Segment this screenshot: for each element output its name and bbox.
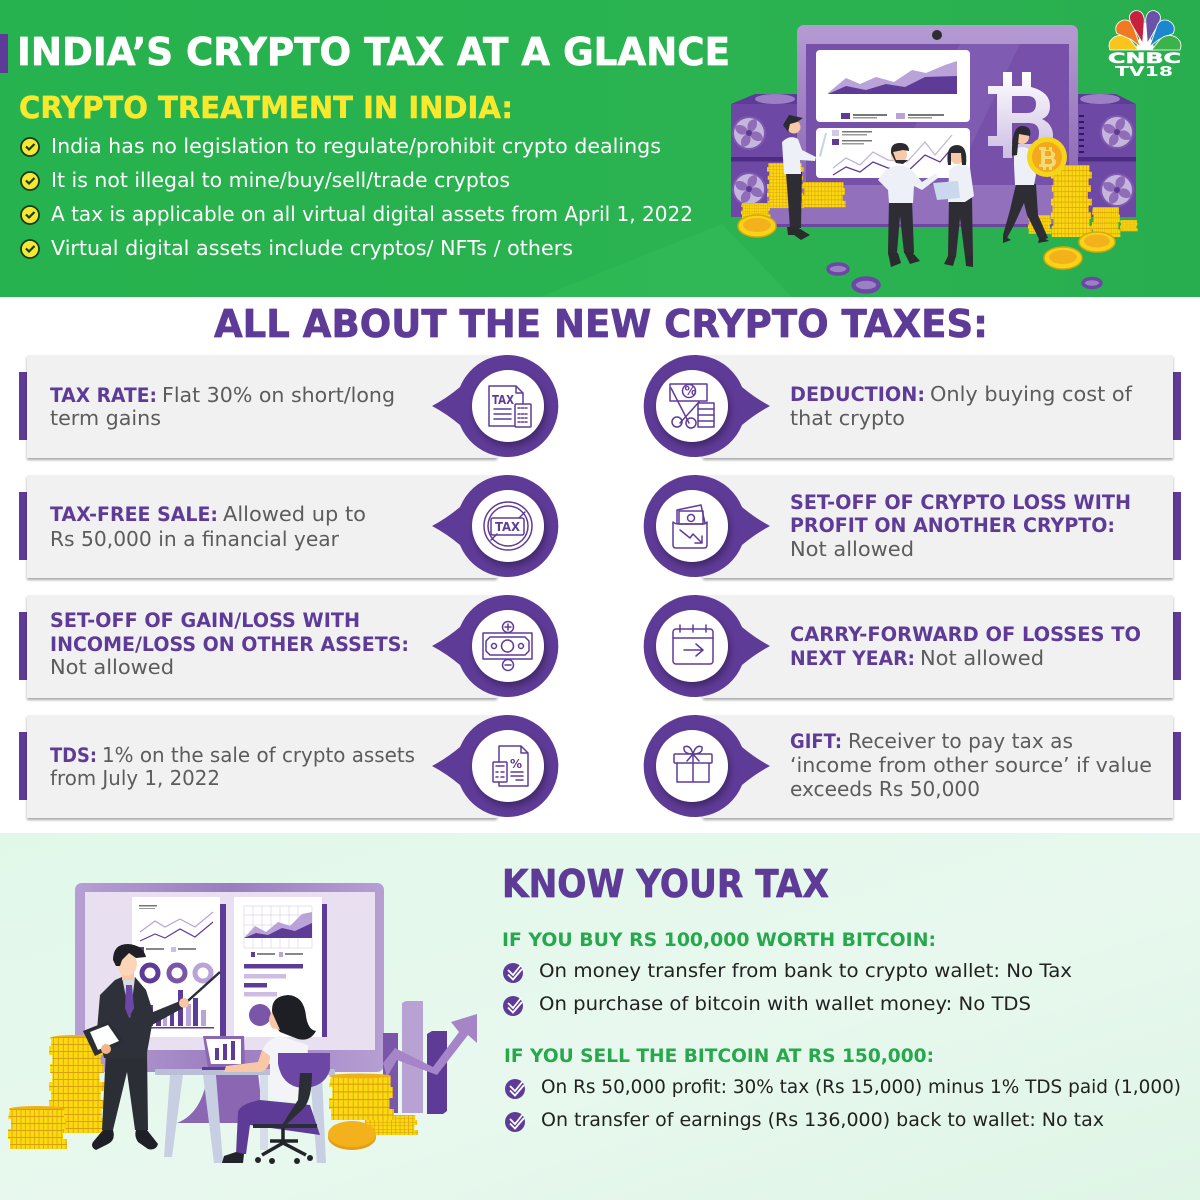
logo: CNBC TV18: TV18: [1115, 65, 1173, 80]
icon: banknote plus minus: [432, 595, 558, 697]
panel: deduction: DEDUCTION:: [790, 383, 925, 406]
buy section: On money transfer from bank to crypto wallet: No Tax: [539, 960, 1072, 982]
chart bars and rising arrow: [383, 1001, 477, 1114]
icon: wallet with falling arrow: [644, 475, 770, 577]
icon: percent document and calculator: %: [510, 757, 522, 771]
panel: tax-free sale: [19, 475, 558, 578]
panel: gift: ‘income from other source’ if value: [790, 753, 1152, 777]
panel: carry-forward: [644, 595, 1181, 698]
panel: deduction: [644, 355, 1181, 458]
panel: tax rate: TAX RATE:: [50, 384, 157, 407]
panel: gift: GIFT:: [790, 730, 842, 753]
panel: set-off gain loss: Not allowed: [50, 655, 174, 679]
panel: gift: Receiver to pay tax as: [848, 729, 1073, 753]
icon: scissors cutting money: [644, 355, 770, 457]
panel: TDS: 1% on the sale of crypto assets: [102, 743, 415, 767]
heading: know your tax: KNOW YOUR TAX: [502, 862, 829, 906]
icon: scissors cutting money: %: [684, 384, 697, 398]
bullet list: [21, 134, 693, 260]
panel: know your tax: [0, 833, 1200, 1200]
panel: TDS: from July 1, 2022: [50, 766, 220, 790]
buy section: On purchase of bitcoin with wallet money: No TDS: [539, 993, 1031, 1015]
panel: set-off gain loss: SET-OFF OF GAIN/LOSS WITH: [50, 609, 360, 632]
illustration: crypto laptop with people: [731, 25, 1138, 292]
panel: TDS: [19, 715, 558, 818]
panel: header: [0, 0, 1200, 297]
panel: deduction: that crypto: [790, 406, 905, 430]
title: INDIA’S CRYPTO TAX AT A GLANCE: [17, 30, 730, 74]
icon: tax document: [432, 355, 558, 457]
laptop: [767, 25, 1078, 227]
icon: calendar arrow: [644, 595, 770, 697]
bullet list: It is not illegal to mine/buy/sell/trade cryptos: [51, 168, 510, 192]
panel: set-off crypto loss: SET-OFF OF CRYPTO LOSS WITH: [790, 491, 1131, 514]
icon: no tax: [432, 475, 558, 577]
bitcoin symbol: [988, 72, 1053, 158]
panel: set-off crypto loss: PROFIT ON ANOTHER CRYPTO:: [790, 514, 1115, 537]
woman holding coin: [1003, 126, 1067, 243]
subheading: CRYPTO TREATMENT IN INDIA:: [19, 91, 513, 126]
panel: tax rate: [19, 355, 558, 458]
panel: set-off gain loss: [19, 595, 558, 698]
panel: carry-forward: Not allowed: [920, 646, 1044, 670]
sell section: IF YOU SELL THE BITCOIN AT RS 150,000:: [504, 1045, 934, 1067]
panel: tax-free sale: TAX-FREE SALE:: [50, 503, 218, 526]
coin stacks: [8, 1035, 418, 1150]
icon: no tax: TAX: [495, 520, 521, 534]
buy section: [502, 929, 1072, 1016]
gears: [828, 264, 1101, 292]
bullet list: India has no legislation to regulate/prohibit crypto dealings: [51, 134, 661, 158]
panel: tax rate: Flat 30% on short/long: [162, 383, 395, 407]
icon: percent document and calculator: [432, 715, 558, 817]
panel: tax-free sale: Rs 50,000 in a financial year: [50, 527, 340, 551]
icon: tax document: TAX: [492, 393, 515, 407]
monitor: [75, 883, 384, 1123]
logo: CNBC TV18: CNBC: [1108, 51, 1181, 67]
panel: set-off crypto loss: Not allowed: [790, 537, 914, 561]
bullet list: Virtual digital assets include cryptos/ NFTs / others: [51, 236, 573, 260]
panel: TDS: TDS:: [50, 744, 97, 767]
logo: CNBC TV18: [1108, 11, 1181, 80]
illustration: business presentation: [8, 883, 477, 1164]
seated woman on chair: [222, 995, 330, 1164]
heading: all about the new crypto taxes: ALL ABOUT THE NEW CRYPTO TAXES:: [214, 302, 988, 346]
title accent bar: [0, 34, 8, 73]
panel: deduction: Only buying cost of: [930, 382, 1133, 406]
bullet list: A tax is applicable on all virtual digital assets from April 1, 2022: [51, 202, 693, 226]
buy section: IF YOU BUY RS 100,000 WORTH BITCOIN:: [502, 929, 936, 951]
panel: tax rate: term gains: [50, 406, 161, 430]
sell section: On transfer of earnings (Rs 136,000) back to wallet: No tax: [541, 1109, 1104, 1131]
panel: set-off gain loss: INCOME/LOSS ON OTHER ASSETS:: [50, 633, 409, 656]
mining rigs: [731, 94, 1136, 217]
person with tablet: [782, 115, 827, 240]
panel: carry-forward: CARRY-FORWARD OF LOSSES TO: [790, 623, 1141, 646]
panel: tax-free sale: Allowed up to: [223, 502, 366, 526]
panel: gift: exceeds Rs 50,000: [790, 777, 980, 801]
woman with tablet: [933, 145, 974, 267]
desk and laptop: [155, 1036, 335, 1163]
sell section: [504, 1045, 1181, 1132]
bearded man: [878, 143, 938, 267]
sell section: On Rs 50,000 profit: 30% tax (Rs 15,000) minus 1% TDS paid (1,000): [541, 1076, 1181, 1098]
panel: set-off crypto loss: [644, 475, 1181, 578]
panel: carry-forward: NEXT YEAR:: [790, 647, 915, 670]
coin stacks: [738, 163, 1138, 269]
icon: gift box: [644, 715, 770, 817]
panel: gift: [644, 715, 1181, 818]
man presenting: [83, 944, 220, 1150]
